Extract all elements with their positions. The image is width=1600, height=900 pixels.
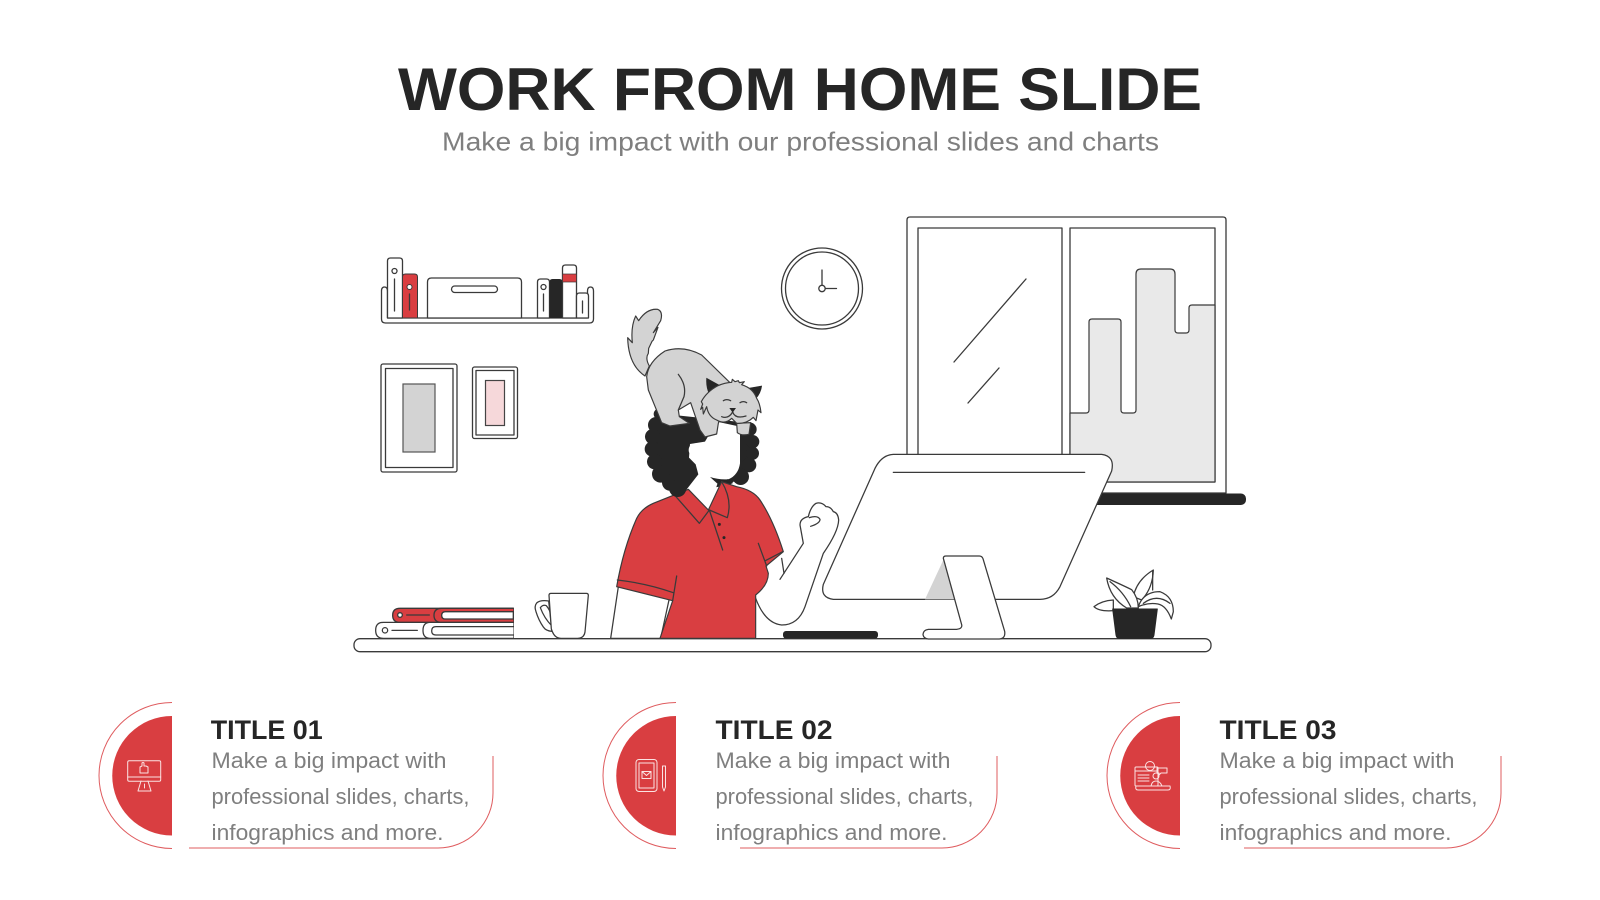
small picture frame <box>472 367 518 438</box>
curly hair <box>645 409 759 493</box>
card 2 <box>603 702 997 848</box>
card 2 red semicircle <box>616 716 676 836</box>
face and neck <box>687 422 740 514</box>
desk <box>354 639 1211 652</box>
right arm with raised fist <box>756 503 839 625</box>
card 2 outline <box>603 702 997 848</box>
potted plant <box>1094 570 1173 638</box>
card 1 body text: Make a big impact with <box>212 748 446 773</box>
card 1 <box>99 702 493 848</box>
red polo shirt <box>617 482 783 638</box>
card 2 body text: professional slides, charts, <box>716 784 974 809</box>
card 3 body text: professional slides, charts, <box>1220 784 1478 809</box>
left arm <box>611 587 669 638</box>
card 2 body text <box>716 748 974 845</box>
card 1 body text: infographics and more. <box>212 820 444 845</box>
card 3 heading: TITLE 03 <box>1220 715 1336 745</box>
card 1 heading: TITLE 01 <box>211 715 323 745</box>
card 1 body text: professional slides, charts, <box>212 784 470 809</box>
icon: tablet with envelope and stylus <box>636 760 666 792</box>
subtitle: Make a big impact with our professional slides and charts <box>442 126 1159 156</box>
stacked books <box>376 608 513 638</box>
card 2 body text: infographics and more. <box>716 820 948 845</box>
card 3 red semicircle <box>1120 716 1180 836</box>
card 3 body text: infographics and more. <box>1220 820 1452 845</box>
cat <box>628 309 762 437</box>
window with skyline <box>907 217 1226 493</box>
large picture frame <box>381 364 457 472</box>
hair tips over shoulder <box>669 480 686 497</box>
icon: online meeting laptop <box>1135 762 1170 790</box>
illustration: home office scene <box>354 217 1246 652</box>
computer monitor <box>823 454 1112 639</box>
person with cat on head <box>611 309 839 638</box>
card 1 body text <box>212 748 470 845</box>
card 3 outline <box>1107 702 1501 848</box>
wall clock <box>782 248 862 329</box>
card 1 red semicircle <box>112 716 172 836</box>
card 2 body text: Make a big impact with <box>716 748 950 773</box>
window sill <box>1085 494 1246 505</box>
icon: monitor with hand <box>128 761 161 791</box>
card 3 <box>1107 702 1501 848</box>
card 3 body text: Make a big impact with <box>1220 748 1454 773</box>
coffee mug <box>535 593 588 638</box>
card 1 outline <box>99 702 493 848</box>
title: WORK FROM HOME SLIDE <box>398 56 1202 123</box>
black mouse pad <box>783 631 878 638</box>
monitor stand <box>925 560 957 599</box>
card 3 body text <box>1220 748 1478 845</box>
card 2 heading: TITLE 02 <box>716 715 832 745</box>
wall shelf with books <box>382 258 594 323</box>
